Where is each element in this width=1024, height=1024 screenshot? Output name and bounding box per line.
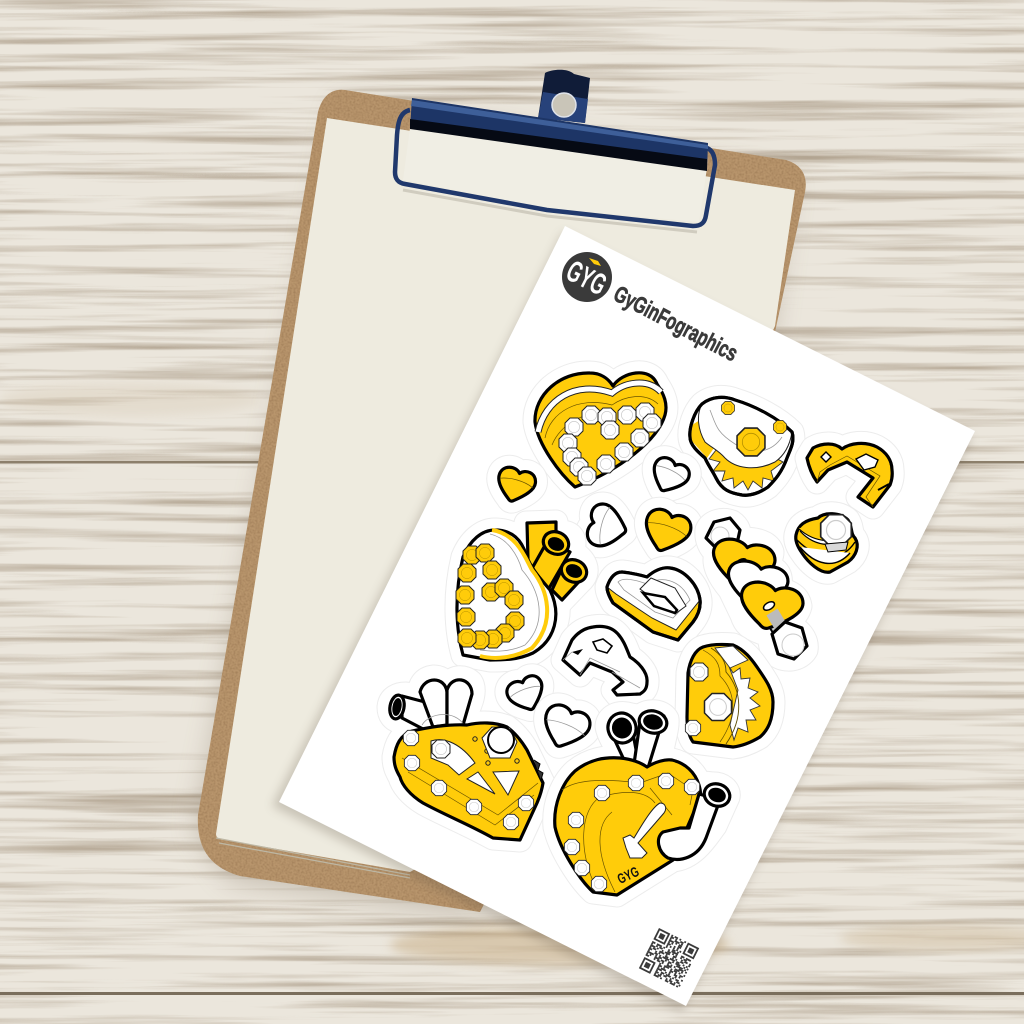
sticker: yellow heart with white bolts	[535, 373, 666, 487]
sticker: small yellow heart	[493, 465, 538, 506]
QR code	[639, 929, 699, 988]
sticker: yellow heart center	[639, 506, 694, 558]
clip tab with hole	[538, 70, 590, 123]
metal clip	[395, 70, 715, 232]
paper under clip	[403, 128, 707, 222]
sticker: white heart on yellow gear	[690, 397, 793, 495]
sticker: yellow heart pump with pipes	[555, 708, 733, 895]
sticker: yellow heart valve with white pipes	[388, 677, 543, 840]
lever	[623, 803, 666, 858]
sticker: small white heart bottom	[537, 701, 593, 754]
large white nut	[482, 727, 517, 758]
sticker: yellow heart with white gear	[685, 644, 773, 747]
white elbow pipe	[658, 794, 720, 859]
sticker: white heart sideways	[585, 502, 630, 551]
sticker: small white heart	[646, 454, 693, 498]
sticker: bolt with stacked hearts	[706, 518, 807, 659]
brand logo badge: GYG	[561, 255, 612, 302]
sticker: white wrench	[563, 626, 647, 695]
yellow pipes	[527, 522, 590, 600]
sticker: white heart with hexagon hole	[607, 568, 700, 640]
brand name: GyGinFographics	[610, 280, 742, 366]
upper white pipes	[605, 708, 669, 768]
sticker: yellow wrench	[807, 443, 892, 507]
wire loop	[395, 110, 715, 226]
sticker: large white heart with yellow bolts and pipes	[456, 522, 590, 660]
clipboard	[195, 90, 806, 915]
clipboard shadow	[195, 100, 790, 915]
sheet shadow	[272, 232, 972, 1012]
white sheet	[279, 226, 975, 1006]
clip bar	[410, 98, 708, 170]
sticker: small white heart left	[504, 673, 549, 716]
sticker: nut on stacked yellow hearts	[796, 514, 857, 572]
small logo mark: GYG	[615, 863, 641, 887]
clipboard board	[198, 90, 806, 912]
valve windows	[431, 740, 475, 775]
shadow under wire	[403, 190, 697, 232]
white pipes	[388, 680, 472, 730]
sticker sheet	[272, 226, 975, 1012]
brand logo badge	[561, 252, 612, 302]
paper stack	[216, 118, 795, 872]
